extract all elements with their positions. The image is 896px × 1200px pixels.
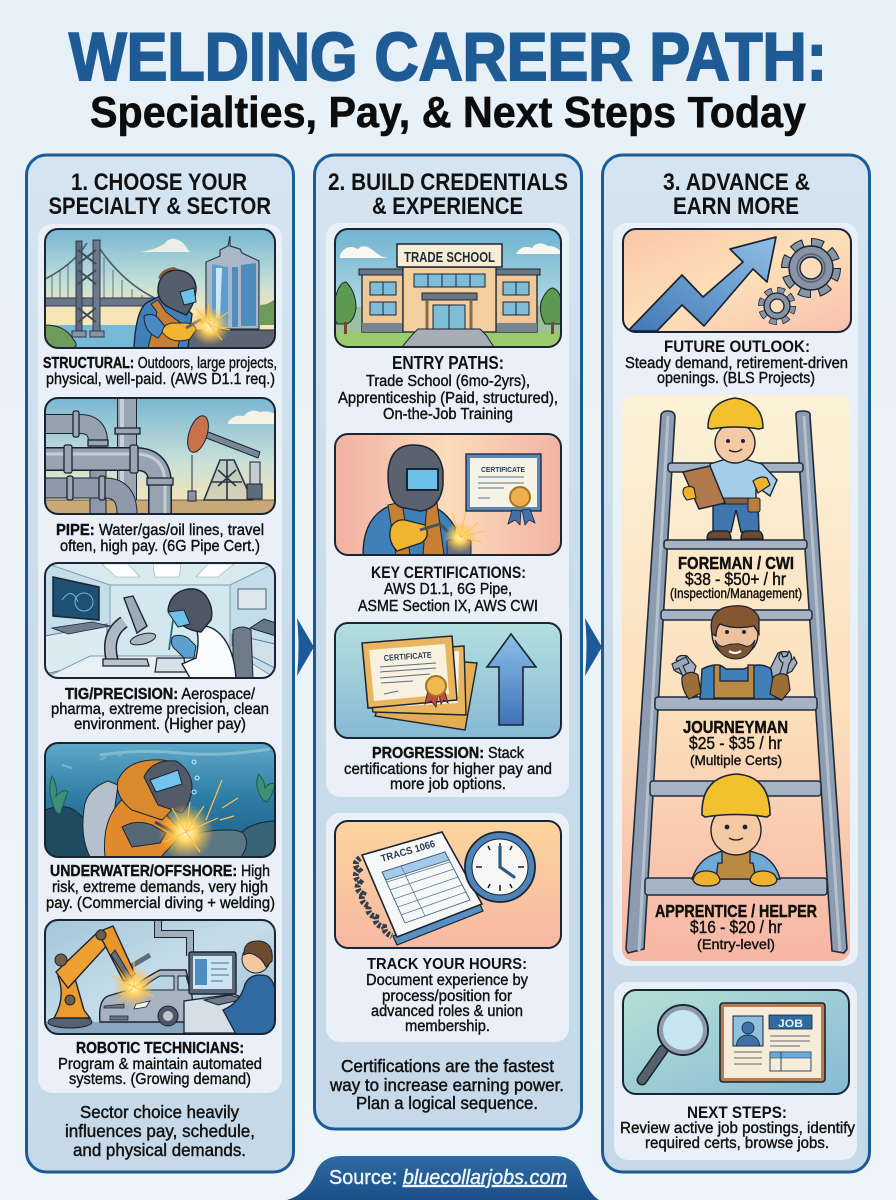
image: job search: JOB xyxy=(778,1018,803,1030)
text: progression: certifications for higher pay and xyxy=(344,761,552,778)
image: growth arrow and gears xyxy=(623,229,851,332)
image: robotic welding xyxy=(45,920,277,1036)
text: entry paths xyxy=(338,353,558,423)
heading: step 3 xyxy=(663,169,810,220)
image: trade school xyxy=(334,229,562,347)
text: foreman pay: (Inspection/Management) xyxy=(670,586,802,601)
text: journeyman pay xyxy=(683,717,788,768)
text: future outlook: FUTURE OUTLOOK: xyxy=(664,337,810,356)
arrow: step 1 to step 2 xyxy=(297,618,314,676)
image: job search xyxy=(623,990,849,1094)
heading: step 2: 2. BUILD CREDENTIALS xyxy=(328,169,568,196)
text: apprentice pay: $16 - $20 / hr xyxy=(690,917,782,937)
image: welder and certificate xyxy=(335,434,561,555)
text: next steps: NEXT STEPS: xyxy=(687,1103,787,1122)
card: track hours xyxy=(326,813,569,1042)
text: future outlook: openings. (BLS Projects) xyxy=(657,370,815,387)
text: underwater: UNDERWATER/OFFSHORE: High xyxy=(50,863,270,880)
text: robotic technicians: ROBOTIC TECHNICIANS: xyxy=(76,1040,244,1057)
panel: choose specialty and sector xyxy=(26,155,294,1172)
text: certification note: Plan a logical sequence. xyxy=(356,1093,538,1113)
text: sector note: and physical demands. xyxy=(73,1140,246,1160)
source banner: Source: bluecollarjobs.com xyxy=(329,1167,567,1189)
text: structural xyxy=(43,355,277,388)
text: robotic technicians xyxy=(58,1040,262,1088)
image: pipes and oil pump xyxy=(45,398,275,514)
text: journeyman pay: JOURNEYMAN xyxy=(683,717,788,737)
text: TIG precision: environment. (Higher pay) xyxy=(74,716,246,733)
image: stacked certificates and up arrow xyxy=(335,623,561,738)
card: outlook and ladder xyxy=(613,223,858,966)
text: structural: physical, well-paid. (AWS D1.1 req.) xyxy=(46,371,275,388)
text: robotic technicians: systems. (Growing demand) xyxy=(69,1071,251,1088)
text: track hours: advanced roles & union xyxy=(371,1003,523,1020)
text: TIG precision: pharma, extreme precision, clean xyxy=(51,701,269,718)
text: progression: PROGRESSION: Stack xyxy=(372,745,524,762)
text: certification note xyxy=(329,1056,564,1113)
image: structural welder with bridge xyxy=(45,229,275,348)
text: foreman pay: FOREMAN / CWI xyxy=(678,553,794,573)
text: track hours: TRACK YOUR HOURS: xyxy=(367,956,527,973)
text: key certifications: AWS D1.1, 6G Pipe, xyxy=(384,581,512,598)
heading: step 2 xyxy=(328,169,568,220)
panel: advance and earn more xyxy=(602,155,870,1172)
title: WELDING CAREER PATH: xyxy=(69,19,827,95)
character: journeyman xyxy=(672,606,797,700)
text: track hours xyxy=(366,956,528,1035)
image: underwater welder xyxy=(45,743,275,860)
text: track hours: process/position for xyxy=(382,988,512,1005)
text: entry paths: Trade School (6mo-2yrs), xyxy=(366,373,530,390)
character: foreman xyxy=(683,398,777,539)
text: key certifications xyxy=(358,563,538,615)
character: apprentice xyxy=(692,774,780,886)
text: underwater xyxy=(46,863,275,912)
text: apprentice pay: (Entry-level) xyxy=(697,937,775,952)
source banner xyxy=(287,1156,599,1200)
image: hours log and clock xyxy=(335,821,561,948)
image: stacked certificates and up arrow: CERTIFICATE xyxy=(383,650,432,663)
text: certification note: way to increase earning power. xyxy=(329,1075,564,1095)
text: pipe xyxy=(56,522,264,555)
panel: build credentials and experience xyxy=(314,155,582,1129)
arrow: step 2 to step 3 xyxy=(585,618,602,676)
text: track hours: Document experience by xyxy=(366,972,528,989)
text: key certifications: KEY CERTIFICATIONS: xyxy=(371,563,526,582)
heading: step 1: SPECIALTY & SECTOR xyxy=(48,193,271,220)
card: next steps xyxy=(614,982,857,1160)
text: entry paths: ENTRY PATHS: xyxy=(392,353,504,373)
text: track hours: membership. xyxy=(405,1018,490,1035)
image: hours log and clock: TRACS 1066 xyxy=(380,839,437,865)
text: underwater: pay. (Commercial diving + welding) xyxy=(46,895,275,912)
text: apprentice pay: APPRENTICE / HELPER xyxy=(655,901,817,921)
text: foreman pay xyxy=(670,553,802,601)
text: journeyman pay: (Multiple Certs) xyxy=(690,753,782,768)
heading: step 1 xyxy=(48,169,271,220)
chart: career ladder xyxy=(622,395,850,961)
heading: step 1: 1. CHOOSE YOUR xyxy=(71,169,247,196)
text: sector note xyxy=(65,1102,255,1160)
text: sector note: influences pay, schedule, xyxy=(65,1121,255,1141)
text: TIG precision xyxy=(51,686,269,733)
text: apprentice pay xyxy=(655,901,817,952)
text: underwater: risk, extreme demands, very high xyxy=(52,879,268,896)
text: pipe: PIPE: Water/gas/oil lines, travel xyxy=(56,522,264,539)
title: Specialties, Pay, & Next Steps Today xyxy=(90,88,806,137)
text: foreman pay: $38 - $50+ / hr xyxy=(685,569,786,589)
text: certification note: Certifications are the fastest xyxy=(341,1056,554,1076)
text: pipe: often, high pay. (6G Pipe Cert.) xyxy=(60,538,260,555)
text: entry paths: On-the-Job Training xyxy=(383,406,513,423)
text: progression xyxy=(344,745,552,793)
card: credentials xyxy=(326,223,569,797)
text: robotic technicians: Program & maintain automated xyxy=(58,1056,262,1073)
text: progression: more job options. xyxy=(390,776,506,793)
card: specialties xyxy=(38,224,282,1093)
heading: step 3: 3. ADVANCE & xyxy=(663,169,810,196)
text: TIG precision: TIG/PRECISION: Aerospace/ xyxy=(65,686,256,703)
image: welder and certificate: CERTIFICATE xyxy=(481,465,525,474)
image: trade school: TRADE SCHOOL xyxy=(404,249,495,266)
text: next steps xyxy=(620,1103,855,1152)
text: next steps: required certs, browse jobs. xyxy=(645,1135,829,1152)
text: sector note: Sector choice heavily xyxy=(80,1102,239,1122)
text: future outlook xyxy=(625,337,848,387)
text: next steps: Review active job postings, identify xyxy=(620,1120,855,1137)
text: journeyman pay: $25 - $35 / hr xyxy=(689,733,782,753)
ladder rails and rungs xyxy=(626,411,847,953)
text: key certifications: ASME Section IX, AWS CWI xyxy=(358,598,538,615)
image: TIG precision lab xyxy=(45,563,276,678)
heading: step 2: & EXPERIENCE xyxy=(372,193,523,220)
text: future outlook: Steady demand, retirement-driven xyxy=(625,355,848,372)
text: entry paths: Apprenticeship (Paid, structured), xyxy=(338,390,558,407)
heading: step 3: EARN MORE xyxy=(673,193,799,220)
text: structural: STRUCTURAL: Outdoors, large projects, xyxy=(43,355,277,372)
title xyxy=(69,19,827,137)
